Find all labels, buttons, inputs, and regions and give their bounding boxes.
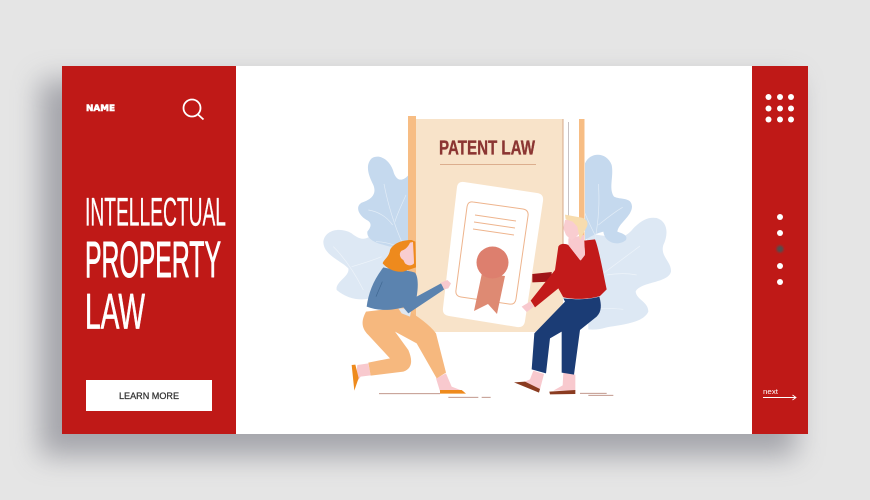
panel: white centre xyxy=(236,66,752,434)
book page xyxy=(416,119,563,332)
next link with arrow: next xyxy=(763,387,779,396)
seal xyxy=(476,246,508,278)
book spines xyxy=(408,116,416,332)
left foliage xyxy=(323,157,417,300)
illustration: patent law xyxy=(323,116,671,397)
character: man xyxy=(514,215,613,395)
right foliage xyxy=(587,218,671,330)
panel: left red sidebar: INTELLECTUAL xyxy=(85,190,226,234)
title: PROPERTY xyxy=(85,231,221,288)
button: learn more xyxy=(86,380,212,411)
character: woman xyxy=(352,240,491,397)
title: LAW xyxy=(85,284,145,340)
icon: search xyxy=(184,100,204,120)
button: learn more: LEARN MORE xyxy=(119,391,179,402)
logo name: NAME xyxy=(86,104,115,114)
pagination dots xyxy=(776,214,784,285)
heading: patent law: PATENT LAW xyxy=(439,138,535,160)
certificate xyxy=(443,182,543,327)
panel: right red sidebar xyxy=(752,66,808,434)
icon: dot grid menu xyxy=(766,94,794,122)
next link with arrow xyxy=(763,387,796,400)
title xyxy=(85,190,226,340)
seal ribbon xyxy=(474,273,505,314)
panel: left red sidebar xyxy=(62,66,236,434)
